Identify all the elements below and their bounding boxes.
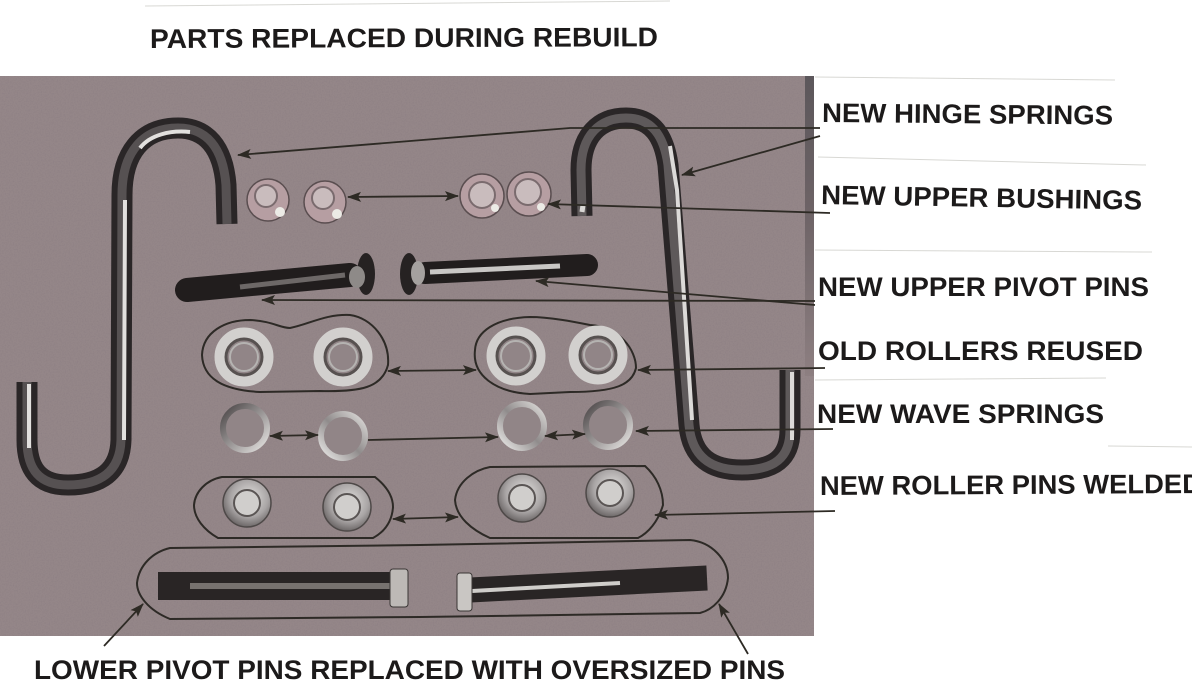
old rollers — [202, 315, 636, 394]
upper bushings — [247, 172, 551, 223]
label: new hinge springs: NEW HINGE SPRINGS — [822, 98, 1113, 131]
lower pivot pins — [137, 540, 728, 619]
wave springs — [223, 403, 630, 458]
right hinge spring — [581, 118, 792, 470]
roller pins — [194, 466, 663, 538]
label: new wave springs: NEW WAVE SPRINGS — [817, 399, 1104, 429]
panel: parts photo background — [0, 76, 814, 636]
title: PARTS REPLACED DURING REBUILD — [150, 22, 658, 54]
label: old rollers reused: OLD ROLLERS REUSED — [818, 336, 1143, 366]
upper pivot pins — [187, 253, 587, 295]
faint scan lines — [145, 1, 1192, 447]
label: new upper pivot pins: NEW UPPER PIVOT PINS — [818, 272, 1149, 302]
left hinge spring — [27, 128, 227, 485]
arrows — [104, 128, 835, 654]
label: new upper bushings: NEW UPPER BUSHINGS — [821, 180, 1142, 216]
label: new roller pins welded: NEW ROLLER PINS WELDED — [820, 469, 1192, 501]
